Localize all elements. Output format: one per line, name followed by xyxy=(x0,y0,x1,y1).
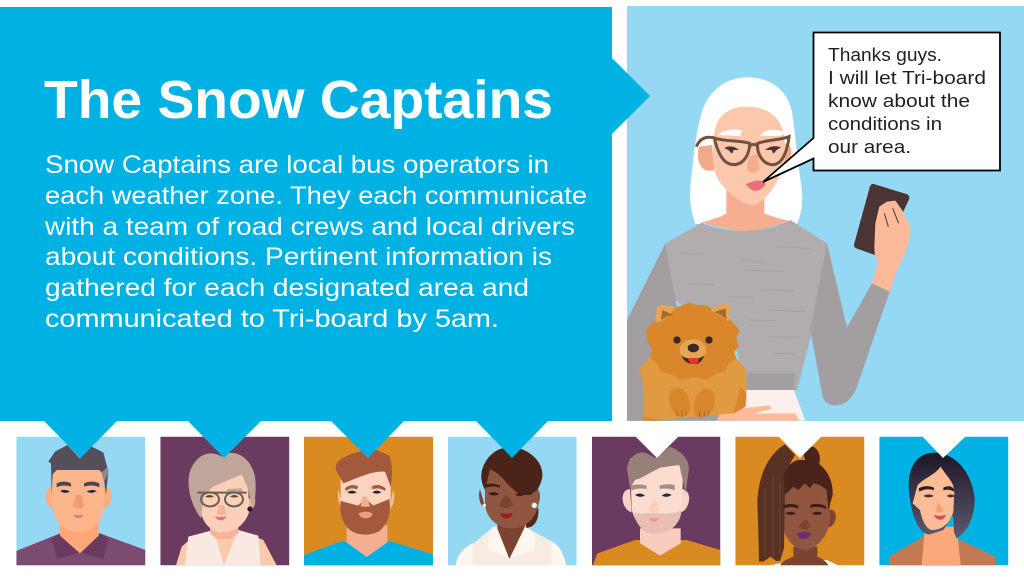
portrait 2: older woman with glasses xyxy=(160,437,289,565)
sweater torso xyxy=(665,220,829,390)
portrait 4: woman with dark skin and earrings xyxy=(448,437,577,565)
dog muzzle xyxy=(680,339,706,361)
left sleeve xyxy=(627,243,687,421)
white hair xyxy=(690,77,802,224)
lips xyxy=(746,180,766,191)
panel: illustration background xyxy=(627,6,1024,421)
dog body xyxy=(639,357,746,421)
panel: title and description xyxy=(0,0,650,421)
dog nose xyxy=(688,344,699,352)
eyes xyxy=(724,146,739,153)
dog paws xyxy=(669,388,690,417)
eyebrows xyxy=(718,129,742,136)
panel background with arrow xyxy=(0,7,650,421)
nose xyxy=(747,154,760,173)
dog eyes xyxy=(673,336,681,344)
body text: Snow Captains are local bus operators in xyxy=(45,151,549,179)
portrait 7: woman with bob haircut xyxy=(879,437,1008,565)
pointers from panel to portraits 1 to 4 xyxy=(43,420,549,458)
body text: each weather zone. They each communicate xyxy=(45,182,587,210)
body text: gathered for each designated area and xyxy=(45,274,529,302)
dog mouth xyxy=(681,356,704,364)
body text: about conditions. Pertinent information is xyxy=(45,243,552,271)
speech text: I will let Tri-board xyxy=(828,68,986,88)
shirt under sweater xyxy=(717,390,805,421)
speech text: Thanks guys. xyxy=(828,45,942,65)
neck and chest xyxy=(701,190,790,233)
speech bubble xyxy=(763,32,1000,182)
right sleeve xyxy=(810,243,890,405)
portrait 3: bearded man xyxy=(304,437,433,565)
portrait 1: man with dark hair xyxy=(16,437,145,565)
body text: with a team of road crews and local drivers xyxy=(44,213,575,241)
portrait 5: man with grey hair and stubble xyxy=(592,437,720,565)
speech text: know about the xyxy=(828,91,970,111)
white notches over portraits 5 to 7 xyxy=(635,436,966,458)
ear xyxy=(698,145,714,171)
hand and forearm xyxy=(872,201,910,292)
body text xyxy=(44,151,587,333)
glasses xyxy=(696,137,789,165)
dog head xyxy=(646,303,740,380)
dog xyxy=(639,303,746,421)
body text: communicated to Tri-board by 5am. xyxy=(45,305,499,333)
speech text: conditions in xyxy=(828,114,942,134)
title: The Snow Captains xyxy=(44,70,553,130)
dog ears xyxy=(655,305,675,322)
lower hand xyxy=(717,405,799,421)
portrait 6: woman with braids xyxy=(735,437,864,565)
face xyxy=(713,107,785,205)
illustration: woman with dog and phone xyxy=(627,77,910,421)
phone xyxy=(854,184,909,256)
sweater texture xyxy=(680,247,810,354)
gap behind the arrow xyxy=(612,0,627,421)
speech text xyxy=(828,45,986,157)
speech text: our area. xyxy=(828,137,911,157)
